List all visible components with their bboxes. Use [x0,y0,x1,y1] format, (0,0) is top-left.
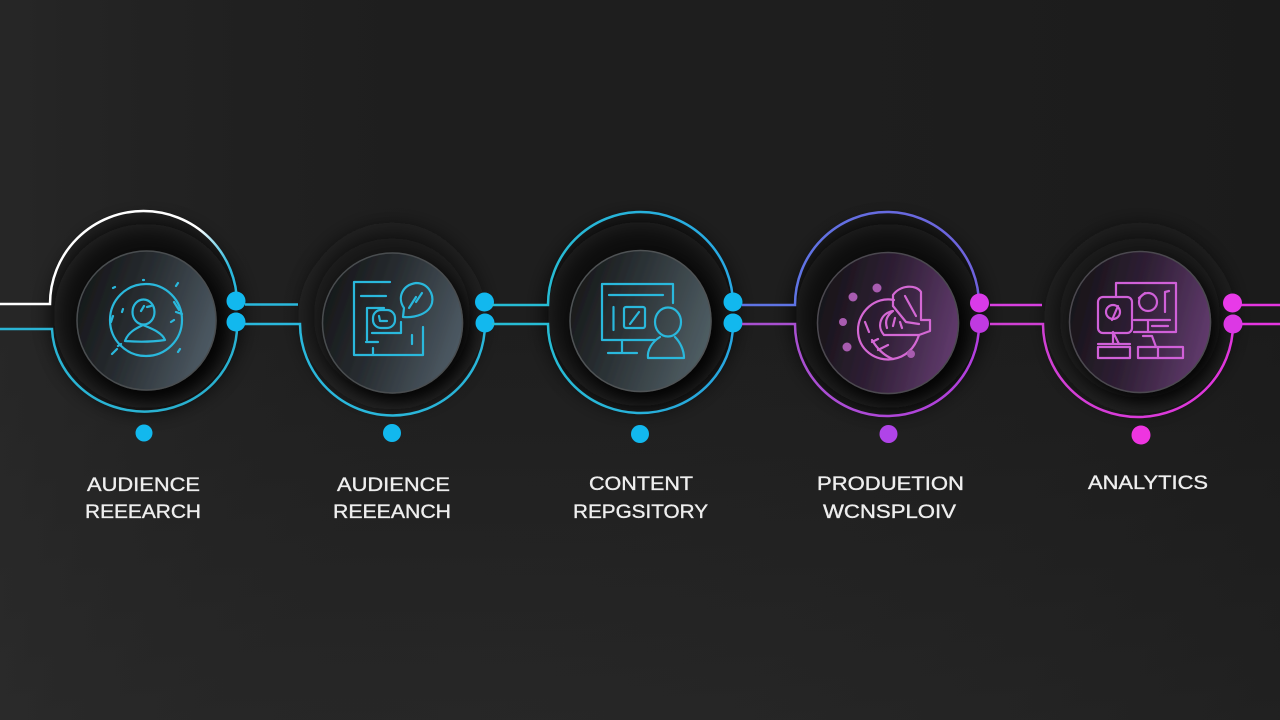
step 1 bottom connector arc [0,322,237,412]
step 3 upper node [724,292,742,312]
step 4 dark well [796,224,980,408]
step 4 label: WCNSPLOIV [823,502,956,523]
icon 4 satellite dots [839,284,915,358]
step 2 label: REEEANCH [333,502,451,523]
step 2 dark glow [306,230,478,402]
step 5 exit links [1240,305,1280,324]
step 5 label: ANALYTICS [1088,473,1208,494]
step 4 top connector arc [742,212,979,305]
step 3 label: CONTENT [589,474,693,495]
icon: gauge and workflow [858,287,930,359]
step 1 bottom dot [136,424,152,442]
step 2 lower node [476,314,494,332]
step 4 disc [818,252,958,394]
step 4 label: PRODUETION [817,474,964,495]
step 3 disc [570,250,711,392]
step 2 upper node [475,292,494,312]
step 5 bottom connector arc [990,324,1233,417]
step 1 disc [77,251,216,390]
step 5 bottom dot [1132,426,1150,444]
step 5 disc [1070,252,1210,392]
icon: document with speech bubble [354,282,432,355]
icon: person in circle [110,280,182,356]
step 1 upper node [226,292,246,310]
step 2: audience research [245,230,494,523]
step 3 bottom connector arc [492,324,733,413]
step 5 dark glow [1052,230,1228,406]
step 5 upper node [1223,294,1242,312]
step 3 top connector arc [492,212,733,305]
step 1 label: AUDIENCE [87,475,200,496]
step 1: audience research [0,211,246,523]
step 5: analytics [990,230,1280,494]
step 2 top link [245,303,298,306]
step 5 lower node [1224,314,1242,334]
step 3: content repository [492,212,742,523]
step 1 lower node [226,312,246,332]
step 3 lower node [724,314,742,332]
icon: monitor and person [602,284,684,358]
step 4 lower node [970,314,989,333]
step 4 upper node [970,294,989,312]
step 3 dark well [548,222,732,406]
step 3 label: REPGSITORY [573,502,708,523]
step 4 bottom dot [880,425,898,443]
step 2 disc [322,253,462,393]
step 4 bottom connector arc [742,324,979,416]
step 1 dark well [54,224,238,408]
step 2 bottom dot [383,424,401,442]
icon: dashboard devices [1098,283,1183,358]
step 2 bottom connector arc [245,323,485,415]
step 1 top connector arc [0,211,237,304]
step 4: production workflow [742,212,989,523]
step 5 top link [990,304,1042,306]
step 3 bottom dot [631,425,649,443]
step 2 label: AUDIENCE [337,475,450,496]
step 1 label: REEEARCH [85,502,201,523]
